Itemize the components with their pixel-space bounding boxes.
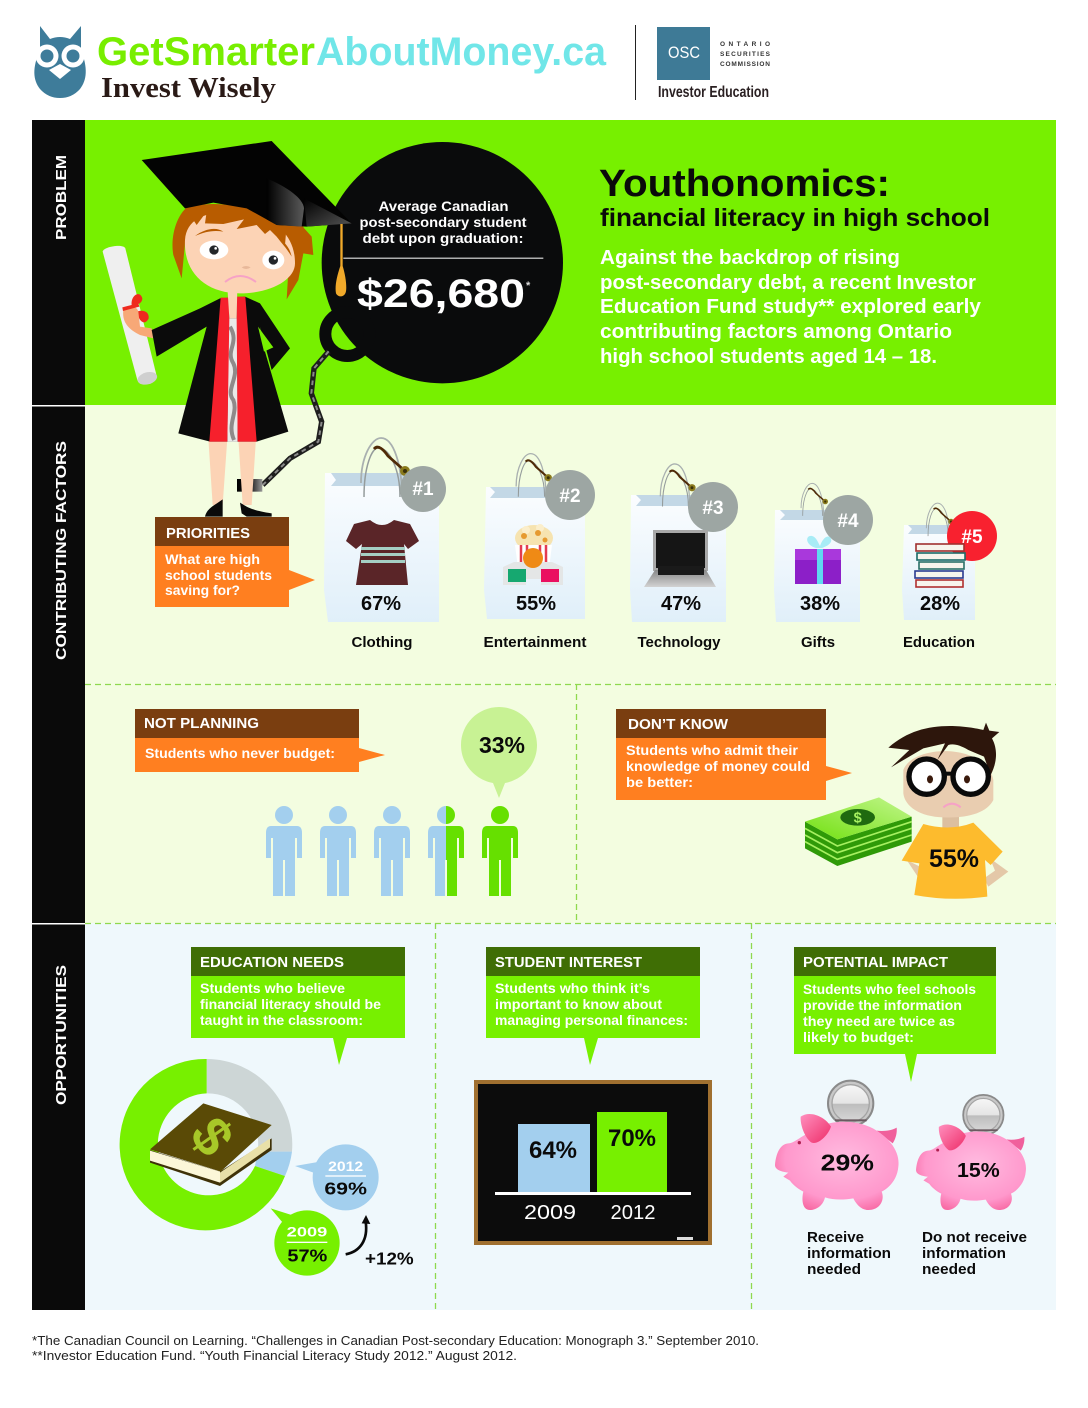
shopping tag: education: Education (903, 635, 975, 651)
bubble: 2009 (271, 1208, 340, 1276)
callout: potential impact: POTENTIAL IMPACT (803, 955, 948, 971)
piggy banks (775, 1081, 1026, 1210)
icon: stack of books (915, 544, 965, 587)
shoes (205, 499, 272, 517)
ball text (357, 198, 531, 316)
logo: OSC Investor Education: SECURITIES (720, 51, 771, 58)
logo: OSC Investor Education: ONTARIO (720, 41, 770, 48)
icon: book (150, 1103, 272, 1186)
fringe (187, 204, 312, 255)
hand (123, 306, 153, 338)
intro paragraph: high school students aged 14 – 18. (600, 346, 937, 368)
icon: owl (34, 26, 86, 98)
logo: OSC Investor Education: OSC (668, 43, 700, 62)
shopping tag: technology: 47% (661, 593, 701, 615)
tassel (336, 224, 346, 296)
hair back (172, 205, 313, 299)
logo wordmark: GetSmarter (97, 30, 315, 74)
piggy bank: no information (916, 1095, 1026, 1210)
label: contributing factors: CONTRIBUTING FACTORS (53, 441, 70, 660)
callout: potential impact: they need are twice as (803, 1013, 955, 1029)
head (903, 751, 993, 817)
intro paragraph: Against the backdrop of rising (600, 247, 900, 269)
label: receive information needed: information (807, 1246, 891, 1262)
piggy bank: receive information (775, 1081, 899, 1210)
legs (208, 438, 256, 505)
callout: don't know: be better: (626, 774, 693, 790)
shopping tag: entertainment: Entertainment (484, 635, 587, 651)
mouth (943, 804, 961, 807)
nose (242, 266, 251, 269)
callout: student interest: managing personal finances: (495, 1012, 688, 1028)
intro paragraph: post-secondary debt, a recent Investor (600, 272, 976, 294)
arms (907, 858, 1008, 887)
ball text: * (526, 280, 531, 292)
callout: education needs: EDUCATION NEEDS (200, 955, 344, 971)
callout: education needs (191, 947, 405, 1065)
label: do not receive information needed (922, 1230, 1027, 1278)
icon: book: $ (178, 1106, 246, 1167)
shopping tag: technology: #3 (702, 498, 724, 519)
55 percent: 55% (929, 845, 979, 873)
shopping tag: technology (630, 464, 738, 651)
shopping tag: gifts: #4 (837, 511, 859, 532)
shopping tag: technology: Technology (638, 635, 720, 651)
callout: not planning: Students who never budget: (145, 745, 335, 761)
bubble: 2012: 2012 (328, 1158, 363, 1174)
chalkboard bar chart (474, 1080, 712, 1245)
hair (888, 723, 999, 775)
money stack (805, 797, 912, 866)
shopping tag: gifts: 38% (800, 593, 840, 615)
eyebrows (195, 229, 292, 257)
label: do not receive information needed: Do not receive (922, 1230, 1027, 1246)
callout: priorities: school students (165, 567, 272, 583)
callout: student interest (486, 947, 700, 1065)
footnotes: **Investor Education Fund. “Youth Financial Literacy Study 2012.” August 2012. (32, 1348, 517, 1363)
callout: student interest: important to know about (495, 996, 662, 1012)
piggy banks: 15% (957, 1159, 1000, 1182)
bow (132, 294, 149, 322)
ball text: debt upon graduation: (362, 230, 524, 246)
label: receive information needed: Receive (807, 1230, 864, 1246)
shopping tag: entertainment (484, 454, 595, 651)
ball text: post-secondary student (360, 214, 527, 230)
sidebar with section labels (32, 120, 85, 1310)
gown (152, 297, 290, 442)
panel backgrounds (85, 120, 1056, 1310)
33 percent bubble (461, 707, 537, 798)
icon: t-shirt (346, 520, 419, 585)
callout: not planning (135, 709, 385, 772)
mouth (225, 276, 256, 282)
shopping tag: clothing (324, 438, 446, 651)
t-shirt (902, 823, 1003, 899)
label: receive information needed: needed (807, 1262, 861, 1278)
bubble: 2012 (295, 1144, 379, 1210)
intro paragraph: contributing factors among Ontario (600, 321, 952, 343)
neck (227, 287, 237, 318)
callout: don't know (616, 709, 852, 800)
label: problem: PROBLEM (53, 155, 70, 240)
ball text: Average Canadian (378, 198, 508, 214)
bar: 2012: 70% (608, 1125, 656, 1152)
icon: laptop (644, 530, 716, 587)
header logo: GetSmarterAboutMoney (34, 26, 607, 104)
shopping tag: entertainment: #2 (559, 486, 581, 507)
callout: student interest: Students who think it’s (495, 980, 650, 996)
callout: potential impact (794, 947, 996, 1082)
subtitle: financial literacy in high school (600, 204, 990, 232)
label: do not receive information needed: information (922, 1246, 1006, 1262)
footnotes: *The Canadian Council on Learning. “Challenges in Canadian Post-secondary Education: Monograph 3.” September 2010. (32, 1333, 759, 1348)
icon: popcorn and 3D glasses (503, 524, 563, 585)
donut chart with book: +12% (365, 1248, 414, 1268)
callout: don't know: Students who admit their (626, 742, 799, 758)
bar: 2009: 2009 (524, 1202, 576, 1224)
label: opportunities: OPPORTUNITIES (53, 965, 70, 1105)
callout: education needs: Students who believe (200, 980, 345, 996)
callout: education needs: financial literacy should be (200, 996, 381, 1012)
face (185, 213, 295, 293)
scroll (103, 246, 157, 384)
red stole (209, 297, 257, 442)
callout: not planning: NOT PLANNING (144, 716, 259, 732)
debt ball (322, 142, 563, 383)
label: receive information needed (807, 1230, 891, 1278)
callout: education needs: taught in the classroom: (200, 1012, 363, 1028)
callout: priorities (155, 517, 315, 607)
shopping tag: clothing: #1 (412, 479, 434, 500)
footnotes (32, 1333, 759, 1363)
logo: OSC Investor Education: COMMISSION (720, 61, 770, 68)
intro paragraph (600, 247, 982, 368)
graduation cap (142, 141, 352, 227)
debt amount: $26,680 (357, 272, 525, 316)
shopping tag: entertainment: 55% (516, 593, 556, 615)
callout: priorities: saving for? (165, 582, 240, 598)
callout: don't know: knowledge of money could (626, 758, 810, 774)
bubble: 2012: 69% (324, 1179, 367, 1199)
dress (227, 318, 238, 442)
shopping tag: education: #5 (961, 527, 983, 548)
leg shackle (237, 479, 262, 492)
callout: priorities: What are high (165, 551, 260, 567)
callout: potential impact: Students who feel schools (803, 981, 976, 997)
neck (942, 813, 959, 830)
callout: priorities: PRIORITIES (166, 526, 250, 542)
tagline: Invest Wisely (101, 72, 277, 104)
glasses (909, 759, 944, 794)
callout: student interest: STUDENT INTEREST (495, 955, 642, 971)
logo: OSC Investor Education (657, 27, 771, 101)
bar: 2009 (518, 1124, 590, 1224)
shopping tag: gifts (774, 483, 873, 651)
chain (263, 351, 329, 485)
bar: 2012 (597, 1112, 667, 1224)
graduate with debt ball and chain (103, 141, 563, 517)
callout: potential impact: provide the information (803, 997, 962, 1013)
piggy banks: 29% (821, 1150, 874, 1176)
bar: 2009: 64% (529, 1137, 577, 1164)
boy with glasses and money (805, 723, 1008, 899)
money stack: $ (854, 811, 862, 827)
shopping tag: gifts: Gifts (801, 635, 835, 651)
donut chart with book (120, 1059, 414, 1276)
logo: OSC Investor Education: Investor Education (658, 84, 769, 101)
arrow: increase (346, 1215, 370, 1254)
bar: 2012: 2012 (610, 1202, 656, 1224)
33 percent bubble: 33% (479, 732, 525, 758)
eyes (200, 241, 228, 259)
bubble: 2009: 57% (287, 1245, 327, 1265)
shopping tag: clothing: Clothing (352, 635, 412, 651)
callout: don't know: DON’T KNOW (628, 717, 728, 733)
label: do not receive information needed: needed (922, 1262, 976, 1278)
callout: potential impact: likely to budget: (803, 1029, 914, 1045)
bubble: 2009: 2009 (287, 1224, 328, 1240)
icon: gift box (795, 536, 841, 584)
people pictogram (266, 806, 518, 896)
shopping tag: education: 28% (920, 593, 960, 615)
header logo: GetSmarterAboutMoney: AboutMoney.ca (316, 30, 607, 74)
shopping tag: education (902, 503, 997, 651)
title: Youthonomics: (599, 163, 890, 205)
shopping tag: clothing: 67% (361, 593, 401, 615)
intro paragraph: Education Fund study** explored early (600, 296, 982, 318)
